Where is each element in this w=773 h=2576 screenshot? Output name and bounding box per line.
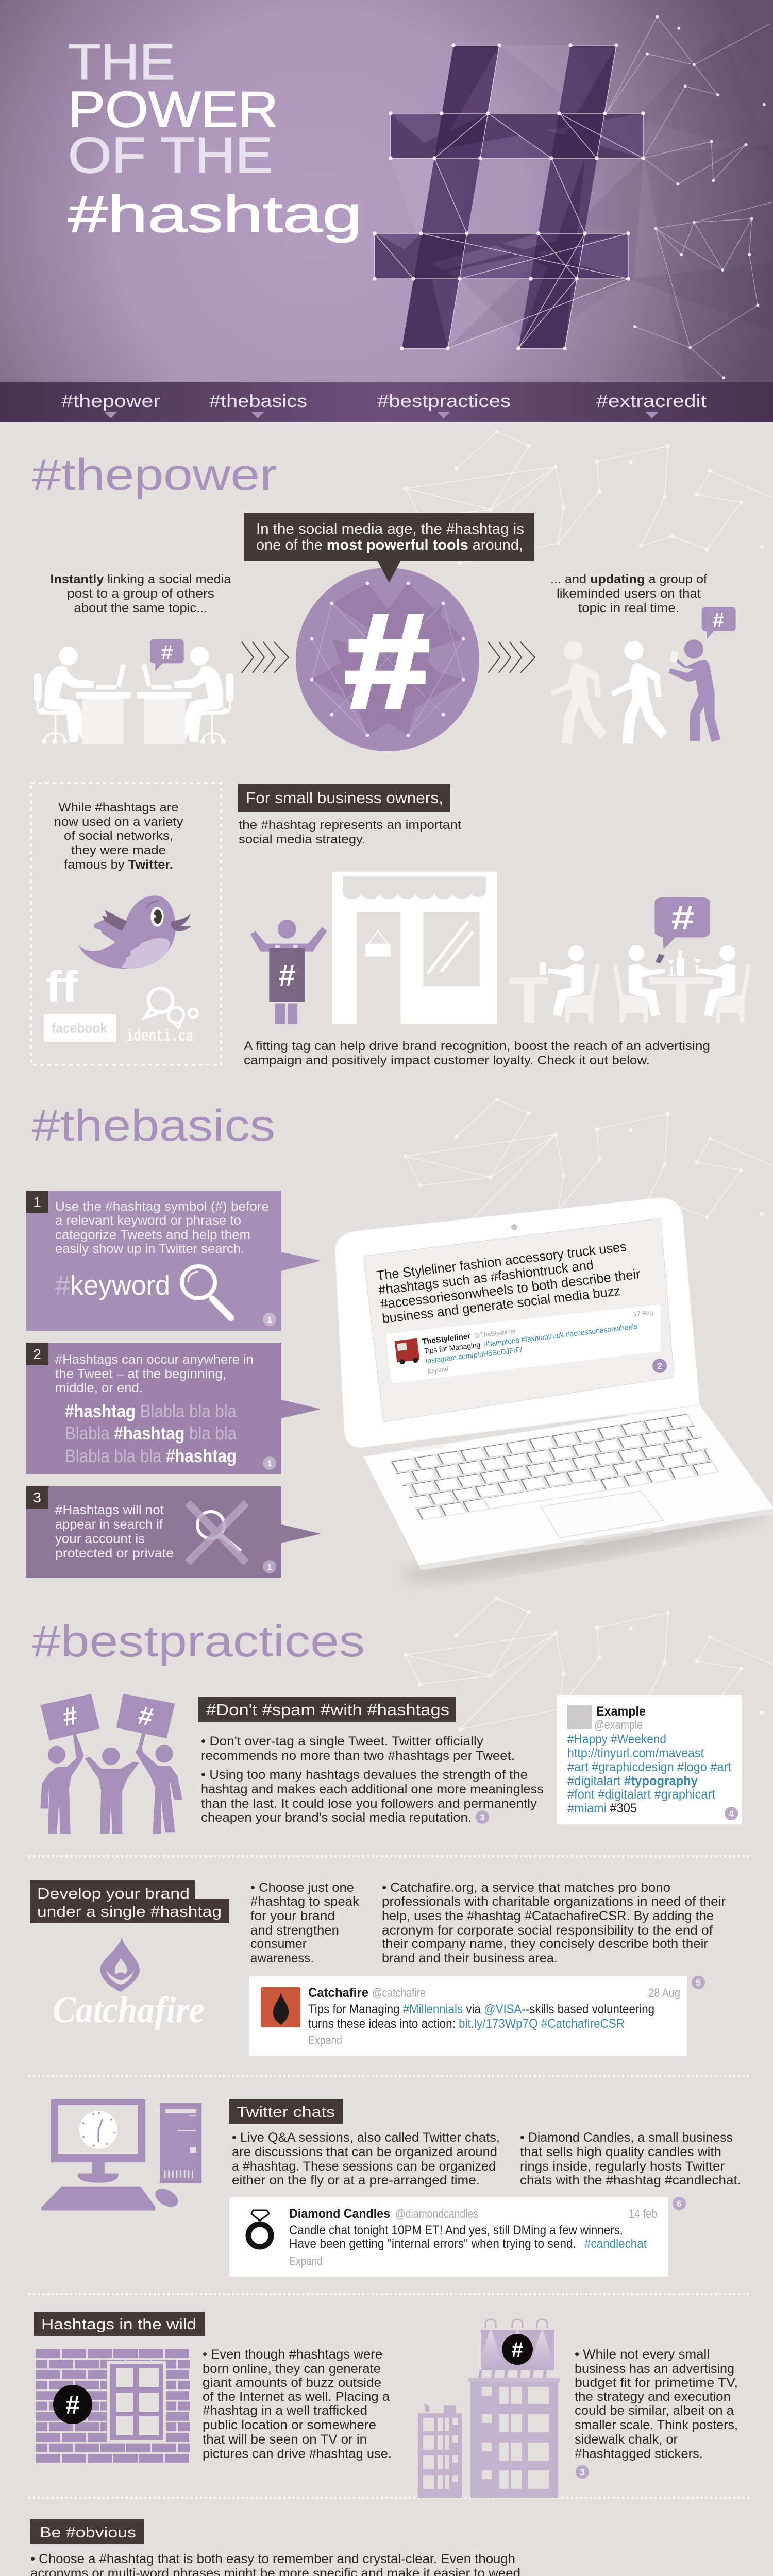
text: brand recognition: [244, 1039, 710, 1067]
navigation bar: #extracredit: [596, 392, 707, 411]
text: catchafire example: [382, 1880, 726, 1965]
example tweet card: #font #digitalart #graphicart: [567, 1787, 715, 1802]
text: small business advertising: the strategy and execution: [575, 2389, 731, 2404]
tweet text: TheStyleliner: [422, 1332, 471, 1346]
title: THE: [68, 33, 175, 90]
example tweet card: #art #graphicdesign #logo #art: [567, 1760, 731, 1774]
icon: speech bubble hash: #: [161, 641, 173, 664]
text: small business advertising: smaller scale. Think posters,: [575, 2418, 738, 2432]
text: updating: topic in real time.: [578, 601, 679, 615]
text: diamond candles: that sells high quality candles with: [520, 2145, 721, 2159]
citation 4: 4: [729, 1809, 734, 1819]
citation 1: [263, 1313, 276, 1326]
panel: basics tip 2: [26, 1343, 321, 1474]
text: occur anywhere: the Tweet – at the beginning,: [55, 1367, 226, 1381]
keyboard: [390, 1413, 719, 1520]
diamond candles tweet card: [229, 2197, 668, 2277]
diamond candles tweet card: @diamondcandles: [395, 2207, 478, 2221]
text: diamond candles: chats with the #hashtag #candlechat.: [520, 2173, 741, 2188]
panel: made famous by twitter: [31, 783, 221, 1065]
text: small business advertising: • While not every small: [575, 2347, 710, 2362]
text: buzz outside the internet: • Even though #hashtags were: [203, 2347, 382, 2362]
text: catchafire example: acronym for corporate social responsibility to the end of: [382, 1923, 713, 1938]
text: instantly linking: [51, 572, 231, 615]
text: twitter note: famous by Twitter.: [64, 858, 173, 872]
text: don't over-tag: • Don't over-tag a single Tweet. Twitter officially: [201, 1734, 484, 1749]
text: strategy: the #hashtag represents an important: [239, 818, 461, 832]
section heading: thebasics: #thebasics: [32, 1101, 275, 1150]
text: small business advertising: budget fit for primetime TV,: [575, 2376, 738, 2390]
number 2: [26, 1343, 48, 1365]
text: buzz outside the internet: of the Internet as well. Placing a: [203, 2389, 390, 2404]
dotted dividers: [28, 1856, 749, 2498]
text: instantly linking: Instantly linking a social media: [51, 572, 231, 586]
storefront: [332, 872, 497, 1024]
text: twitter note: of social networks,: [64, 829, 173, 843]
heading box: Hashtags in the wild: [41, 2316, 196, 2333]
navigation bar: [0, 382, 773, 422]
number 1: 1: [33, 1194, 41, 1210]
faint background facets: [391, 31, 773, 381]
text: catchafire example: help, uses the #hashtag #CatachafireCSR. By adding the: [382, 1909, 714, 1923]
text: catchafire example: • Catchafire.org, a service that matches pro bono: [382, 1880, 670, 1895]
text: choose one hashtag: consumer: [250, 1937, 307, 1951]
icon: person sign hash: #: [279, 959, 295, 992]
sign hash left: #: [60, 1701, 80, 1732]
background constellation: the power: [404, 430, 773, 565]
background constellation: the basics: [404, 1097, 773, 1233]
text: choose one hashtag: #hashtag to speak: [250, 1894, 360, 1909]
touchpad: [541, 1491, 663, 1538]
text: buzz outside the internet: that will be seen on TV or in: [203, 2432, 367, 2447]
citation 5: 5: [696, 1978, 701, 1988]
text: instantly linking: post to a group of others: [67, 587, 214, 601]
text: choose one hashtag: [250, 1880, 360, 1965]
text: small business advertising: business has an advertising: [575, 2362, 734, 2376]
number 3: 3: [33, 1489, 41, 1505]
logo: identi.ca: identi.ca: [126, 1027, 193, 1046]
tweet date: 17 Aug: [633, 1308, 653, 1318]
citation 1: [263, 1456, 276, 1470]
illustration: protesters with signs: [40, 1694, 182, 1834]
text: buzz outside the internet: public location or somewhere: [203, 2418, 376, 2432]
text: twitter note: While #hashtags are: [59, 801, 178, 815]
panel: be obvious: [30, 2519, 744, 2576]
navigation bar: #thebasics: [209, 392, 307, 411]
diamond candles tweet card: Have been getting "internal errors" when trying to send.: [289, 2236, 576, 2251]
diamond candles tweet card: 14 feb: [629, 2207, 657, 2221]
callout: most powerful tools: [244, 513, 534, 583]
text: choose a hashtag: • Choose a #hashtag that is both easy to remember and crystal-clear. Even though: [30, 2552, 515, 2566]
text: diamond candles: rings inside, regularly hosts Twitter: [520, 2159, 725, 2174]
icon: two people at desks: [34, 639, 233, 744]
text: occur anywhere: [55, 1352, 254, 1395]
heading box: [30, 1880, 229, 1923]
catchafire tweet card: @catchafire: [372, 1986, 426, 2000]
tweet avatar: [395, 1338, 420, 1365]
laptop base: [363, 1405, 773, 1570]
citation 5: [692, 1976, 705, 1989]
citation 3: [476, 1810, 489, 1824]
navigation bar: #thepower: [61, 392, 160, 411]
diamond candles tweet card: Diamond Candles: [289, 2207, 390, 2221]
camera: [511, 1224, 517, 1230]
citation 1: [263, 1560, 276, 1573]
text: protected accounts: protected or private: [55, 1546, 174, 1561]
arrows: chevrons right: [488, 642, 535, 673]
text: live Q&A: are discussions that can be organized around: [232, 2145, 497, 2159]
citation 3: [576, 2465, 589, 2479]
citation 2: 2: [657, 1361, 662, 1371]
screen caption: #accessoriesonwheels to both describe their: [379, 1266, 642, 1312]
illustration: laptop with tweet: [335, 1198, 773, 1593]
citation 6: 6: [677, 2199, 682, 2209]
citation 3: 3: [480, 1812, 485, 1822]
arrows: chevrons left: [242, 642, 289, 673]
heading box: [30, 2519, 144, 2544]
text: brand recognition: campaign and positively impact customer loyalty. Check it out below.: [244, 1054, 650, 1067]
text: live Q&A: [232, 2130, 500, 2188]
text: use the symbol: a relevant keyword or phrase to: [55, 1213, 241, 1228]
example tweet card: #miami #305: [567, 1801, 637, 1816]
screen caption: The Styleliner fashion accessory truck uses: [376, 1239, 627, 1283]
heading box: #Don't #spam #with #hashtags: [206, 1701, 449, 1719]
text: choose one hashtag: • Choose just one: [250, 1880, 354, 1895]
tweet text: #hamptons #fashiontruck #accessoriesonwheels: [483, 1322, 638, 1349]
number 2: 2: [33, 1346, 41, 1362]
text: updating: [550, 572, 707, 615]
text: don't over-tag: • Using too many hashtags devalues the strength of the: [201, 1768, 528, 1782]
title: POWER: [68, 81, 278, 138]
logo: facebook: facebook: [52, 1020, 107, 1036]
text: protected accounts: [55, 1503, 174, 1561]
example tweet card: #digitalart #typography: [567, 1774, 698, 1788]
catchafire tweet card: 28 Aug: [648, 1986, 680, 2000]
examples of hashtag positions: Blabla bla bla #hashtag: [65, 1446, 237, 1466]
icon: flame: [100, 1937, 140, 1992]
diamond candles tweet card: Expand: [289, 2255, 323, 2268]
text: choose a hashtag: [30, 2552, 520, 2576]
callout: most powerful tools: In the social media age, the #hashtag is: [256, 521, 524, 537]
example tweet card: @example: [594, 1718, 643, 1732]
screen caption: #hashtags such as #fashiontruck and: [378, 1257, 594, 1298]
laptop lid: [335, 1198, 700, 1448]
text: catchafire example: brand and their business area.: [382, 1951, 558, 1965]
citation 3: 3: [580, 2467, 585, 2477]
panel: small business owners: [238, 784, 751, 1067]
panel: basics tip 3: [26, 1486, 321, 1578]
example tweet card: [557, 1695, 742, 1824]
text: live Q&A: either on the fly or at a pre-arranged time.: [232, 2173, 480, 2188]
examples of hashtag positions: Blabla #hashtag bla bla: [65, 1423, 237, 1444]
text: don't over-tag: [201, 1734, 544, 1825]
catchafire tweet card: [249, 1976, 687, 2056]
panel: the power diagram: [34, 513, 736, 751]
logo: facebook: [44, 1014, 116, 1042]
keyword example: #keyword: [55, 1270, 170, 1301]
example tweet card: Example: [596, 1704, 646, 1719]
text: twitter note: [54, 801, 183, 872]
icon: bird: [78, 895, 192, 969]
diamond candles tweet card: #candlechat: [584, 2236, 647, 2251]
heading box: under a single #hashtag: [37, 1904, 222, 1920]
catchafire tweet card: Catchafire: [308, 1986, 368, 2000]
citation 1: 1: [267, 1459, 272, 1468]
diamond candles tweet card: Candle chat tonight 10PM ET! And yes, still DMing a few winners.: [289, 2223, 623, 2238]
icon: three walkers: [550, 607, 736, 744]
section: hero header: [0, 0, 773, 422]
tweet text: Tips for Managing: [424, 1341, 481, 1356]
title: #hashtag: [68, 185, 362, 243]
icon: magnifier: [182, 1266, 231, 1318]
text: use the symbol: [55, 1199, 269, 1256]
text: don't over-tag: hashtag and makes each additional one more meaningless: [201, 1782, 544, 1797]
text: small business advertising: #hashtagged stickers.: [575, 2447, 703, 2461]
logo: friendfeed: ff: [45, 962, 79, 1011]
text: diamond candles: [520, 2130, 741, 2188]
text: brand recognition: A fitting tag can help drive brand recognition, boost the reach of an advertising: [244, 1039, 710, 1053]
sign hash right: #: [136, 1701, 156, 1732]
logo: catchafire: Catchafire: [53, 1989, 205, 2030]
text: occur anywhere: middle, or end.: [55, 1381, 143, 1395]
illustration: buildings with billboard: #: [512, 2338, 523, 2361]
text: choose one hashtag: and strengthen: [250, 1923, 339, 1938]
catchafire tweet card: Expand: [308, 2033, 342, 2047]
examples of hashtag positions: [65, 1401, 237, 1466]
heading box: Develop your brand: [37, 1886, 190, 1902]
panel: basics tip 1: [26, 1191, 321, 1331]
example tweet card: http://tinyurl.com/maveast: [567, 1746, 704, 1760]
text: don't over-tag: recommends no more than two #hashtags per Tweet.: [201, 1749, 515, 1763]
section heading: thepower: #thepower: [32, 450, 277, 500]
text: protected accounts: appear in search if: [55, 1517, 163, 1532]
laptop screen: [363, 1218, 674, 1422]
text: updating: ... and updating a group of: [550, 572, 707, 586]
examples of hashtag positions: #hashtag Blabla bla bla: [65, 1401, 237, 1421]
heading box: Twitter chats: [237, 2104, 335, 2121]
text: updating: likeminded users on that: [557, 587, 701, 601]
network lines at right: [607, 16, 773, 378]
tweet text: [422, 1312, 641, 1375]
text: buzz outside the internet: [203, 2347, 392, 2461]
citation 1: 1: [267, 1315, 272, 1325]
illustration: buildings with billboard: [418, 2319, 560, 2498]
screen caption: business and generate social media buzz: [381, 1283, 621, 1326]
central hash circle: #: [344, 585, 430, 736]
text: catchafire example: professionals with charitable organizations in need of their: [382, 1894, 726, 1909]
heading box: Be #obvious: [40, 2524, 136, 2541]
heading box: [34, 2312, 205, 2336]
text: buzz outside the internet: pictures can drive #hashtag use.: [203, 2447, 392, 2461]
text: protected accounts: #Hashtags will not: [55, 1503, 164, 1517]
panel: twitter chats: [41, 2099, 741, 2277]
text: choose one hashtag: for your brand: [250, 1909, 335, 1923]
navigation bar: #bestpractices: [377, 392, 511, 411]
citation 6: [673, 2197, 686, 2210]
hero background: [0, 0, 773, 382]
tweet text: instagram.com/p/dH5SoDJFrF/: [425, 1345, 523, 1365]
tweet card: [386, 1304, 661, 1383]
illustration: brick wall with hash: [36, 2349, 190, 2464]
text: use the symbol: categorize Tweets and help them: [55, 1228, 250, 1242]
text: don't over-tag: than the last. It could lose you followers and permanently: [201, 1797, 537, 1811]
text: small business advertising: [575, 2347, 738, 2461]
text: choose one hashtag: awareness.: [250, 1951, 314, 1965]
catchafire tweet card: turns these ideas into action: bit.ly/173Wp7Q #CatchafireCSR: [308, 2016, 625, 2031]
text: catchafire example: their company name, they concisely describe both their: [382, 1937, 708, 1951]
text: strategy: [239, 818, 461, 846]
section heading: bestpractices: #bestpractices: [32, 1617, 365, 1666]
text: small business advertising: sidewalk chalk, or: [575, 2432, 678, 2447]
panel: hashtags in the wild: [34, 2312, 738, 2498]
text: occur anywhere: #Hashtags can occur anywhere in: [55, 1352, 254, 1367]
text: live Q&A: a #hashtag. These sessions can be organized: [232, 2159, 496, 2174]
text: buzz outside the internet: born online, they can generate: [203, 2362, 381, 2376]
text: protected accounts: your account is: [55, 1532, 145, 1546]
example tweet card: #Happy #Weekend: [567, 1732, 666, 1747]
logo: identi.ca: [126, 988, 197, 1046]
icon: diner bubble hash: #: [671, 899, 695, 937]
restaurant diners: [510, 897, 751, 1023]
title: [68, 33, 362, 243]
text: instantly linking: about the same topic...: [74, 601, 207, 615]
heading box: [229, 2099, 343, 2124]
illustration: desktop computer: [41, 2099, 201, 2210]
text: twitter note: now used on a variety: [54, 815, 183, 829]
tweet text: Expand: [427, 1365, 449, 1375]
citation 2: [652, 1359, 667, 1373]
callout: most powerful tools: one of the most powerful tools around,: [256, 537, 523, 553]
text: buzz outside the internet: giant amounts of buzz outside: [203, 2376, 381, 2390]
text: don't over-tag: cheapen your brand's social media reputation.: [201, 1810, 472, 1825]
background constellation: best practices: [404, 1596, 773, 1732]
citation 4: [725, 1807, 738, 1820]
heading box: [238, 784, 450, 812]
number 1: [26, 1191, 48, 1213]
text: strategy: social media strategy.: [239, 833, 365, 846]
dashed box: [31, 783, 221, 1065]
central hash circle: [296, 568, 479, 751]
citation 1: 1: [267, 1562, 272, 1572]
text: small business advertising: could be similar, albeit on a: [575, 2403, 734, 2418]
panel: don't spam: [40, 1694, 742, 1834]
screen caption: [376, 1238, 643, 1326]
text: live Q&A: • Live Q&A sessions, also called Twitter chats,: [232, 2130, 500, 2145]
number 3: [26, 1486, 48, 1509]
illustration: brick wall with hash: #: [65, 2391, 80, 2419]
heading box: For small business owners,: [246, 789, 443, 807]
text: use the symbol: easily show up in Twitter search.: [55, 1242, 244, 1256]
icon: walker bubble hash: #: [713, 609, 724, 632]
illustration: storefront and people: [250, 872, 751, 1024]
text: buzz outside the internet: #hashtag in a well trafficked: [203, 2403, 367, 2418]
text: use the symbol: Use the #hashtag symbol (#) before: [55, 1199, 269, 1214]
title: OF THE: [68, 127, 273, 183]
catchafire tweet card: Tips for Managing #Millennials via @VISA--skills based volunteering: [308, 2002, 654, 2016]
icon: crossed magnifier: [188, 1503, 246, 1563]
panel: develop your brand: [30, 1880, 726, 2056]
person with hash sign: [250, 920, 327, 1024]
text: diamond candles: • Diamond Candles, a small business: [520, 2130, 733, 2145]
tweet text: @TheStyleliner: [474, 1327, 517, 1340]
text: twitter note: they were made: [71, 843, 166, 857]
giant hash symbol: [373, 43, 645, 350]
heading box: [198, 1697, 456, 1722]
